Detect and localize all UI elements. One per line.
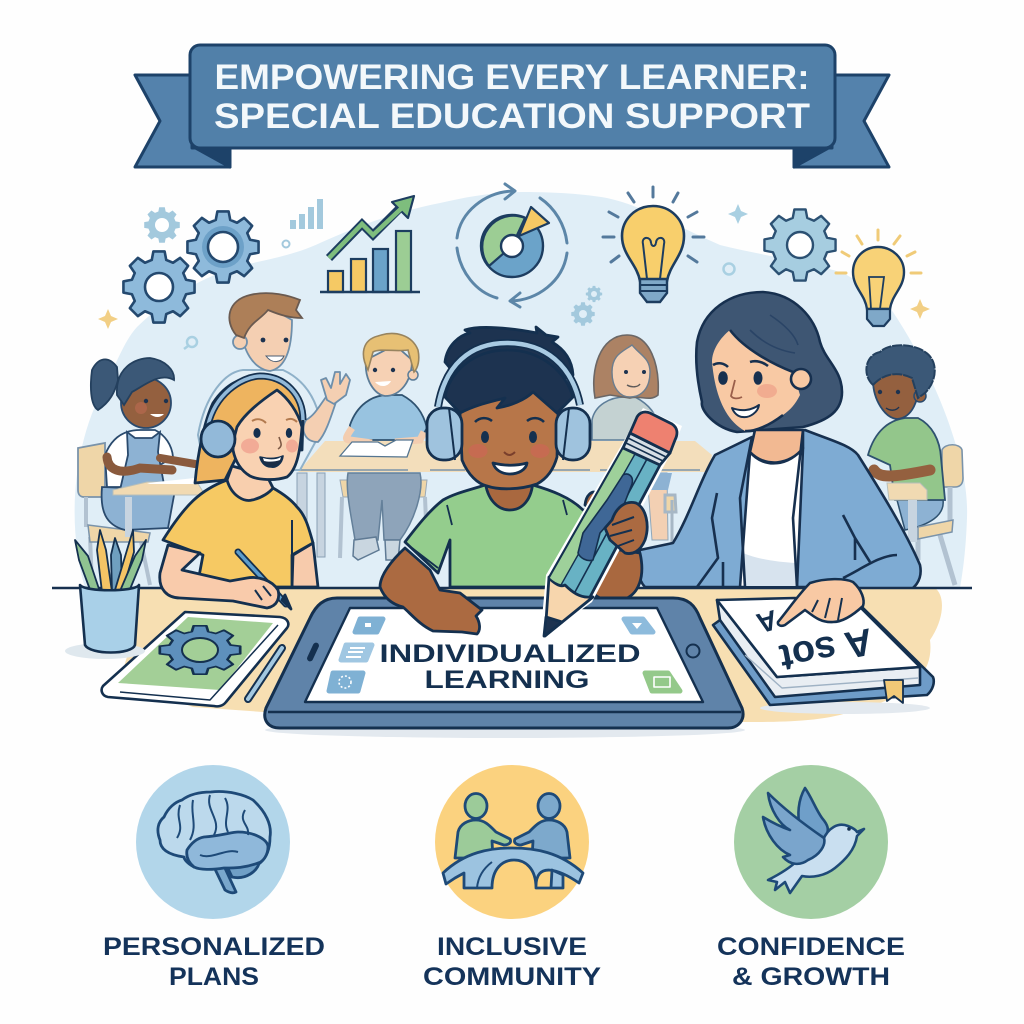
icon: two people on a bridge xyxy=(435,765,589,919)
long table xyxy=(298,441,712,472)
girl headphones xyxy=(208,376,303,425)
tablet label: INDIVIDUALIZED xyxy=(380,640,640,668)
icon: brain xyxy=(136,765,290,919)
feature: confidence and growth xyxy=(717,765,905,991)
book text: A sot xyxy=(776,619,876,679)
small tablet with gear xyxy=(102,612,288,706)
boy forearm behind pencil xyxy=(590,547,642,601)
girl with headphones xyxy=(160,376,318,609)
student: blond boy back xyxy=(340,334,427,560)
girl face xyxy=(233,390,302,480)
boy hair top xyxy=(445,327,573,380)
icon: small gears centre xyxy=(571,286,602,326)
label xyxy=(423,933,601,991)
boy neck xyxy=(485,480,533,510)
boy hair fringe xyxy=(445,350,573,413)
pencil grip xyxy=(578,474,632,561)
title text: SPECIAL EDUCATION SUPPORT xyxy=(214,97,810,136)
boy shirt xyxy=(405,485,595,587)
title text: EMPOWERING EVERY LEARNER: xyxy=(214,58,810,97)
tablet label xyxy=(380,640,640,694)
student: brown-haired boy waving xyxy=(198,293,350,470)
student: girl back right xyxy=(592,335,676,555)
girl arms xyxy=(292,543,318,587)
icon: gears left xyxy=(123,207,259,323)
icon: right gear xyxy=(764,209,836,281)
boy headphone band xyxy=(438,343,580,407)
teacher xyxy=(638,292,921,606)
book xyxy=(713,579,934,714)
icon: bird xyxy=(734,765,888,919)
tablet app tiles xyxy=(329,619,680,691)
label xyxy=(103,933,325,991)
pencil cup xyxy=(65,530,146,659)
pencil halo xyxy=(540,408,682,640)
stylus xyxy=(248,648,282,699)
left desk xyxy=(113,482,205,495)
bookmark xyxy=(884,680,903,703)
tablet label: LEARNING xyxy=(424,666,590,694)
pencil eraser xyxy=(630,412,677,453)
girl pen xyxy=(238,552,286,604)
table surface xyxy=(52,588,972,722)
left chair xyxy=(78,443,105,497)
girl hand and arm xyxy=(160,545,279,608)
label xyxy=(717,933,905,991)
label: PERSONALIZED xyxy=(103,933,325,961)
title text xyxy=(214,58,810,136)
teacher hair xyxy=(696,292,842,432)
title banner xyxy=(135,45,889,167)
banner panel xyxy=(190,45,835,148)
icon: large light bulb xyxy=(603,187,704,302)
pencil body xyxy=(549,448,660,597)
label: PLANS xyxy=(169,963,259,991)
chart: growth bars and arrow xyxy=(320,196,420,292)
pencils xyxy=(75,540,100,595)
big pencil xyxy=(540,408,682,640)
pencil wood xyxy=(545,577,593,636)
boy ear cups xyxy=(427,408,462,460)
student: girl left back xyxy=(91,358,205,537)
pencil ferrule xyxy=(623,433,670,465)
book text xyxy=(753,604,876,679)
student: boy right back xyxy=(866,345,963,585)
teacher cardigan xyxy=(638,430,921,606)
label: COMMUNITY xyxy=(423,963,601,991)
boy face xyxy=(460,380,558,489)
boy's pointing arm xyxy=(380,548,482,634)
teacher face xyxy=(712,330,800,431)
label: INCLUSIVE xyxy=(437,933,587,961)
teacher hand xyxy=(778,579,864,626)
girl shirt xyxy=(163,480,313,587)
boy's hand on pencil xyxy=(605,502,647,554)
teacher cardigan lines xyxy=(697,430,897,587)
main tablet xyxy=(265,598,745,738)
teacher shirt and neck xyxy=(740,448,803,587)
decorative sparkles and rings xyxy=(98,204,930,349)
feature: inclusive community xyxy=(423,765,601,991)
book text: A xyxy=(753,604,781,639)
icon: small light bulb xyxy=(836,230,921,326)
label: & GROWTH xyxy=(732,963,890,991)
background wash xyxy=(75,192,967,588)
main boy with headphones xyxy=(405,327,642,601)
ribbon tails xyxy=(135,75,889,167)
icon: cycle target xyxy=(457,184,567,307)
classroom furniture back xyxy=(78,441,712,585)
icon: small bars xyxy=(282,199,323,248)
table legs xyxy=(297,473,325,557)
label: CONFIDENCE xyxy=(717,933,905,961)
feature: personalized plans xyxy=(103,765,325,991)
